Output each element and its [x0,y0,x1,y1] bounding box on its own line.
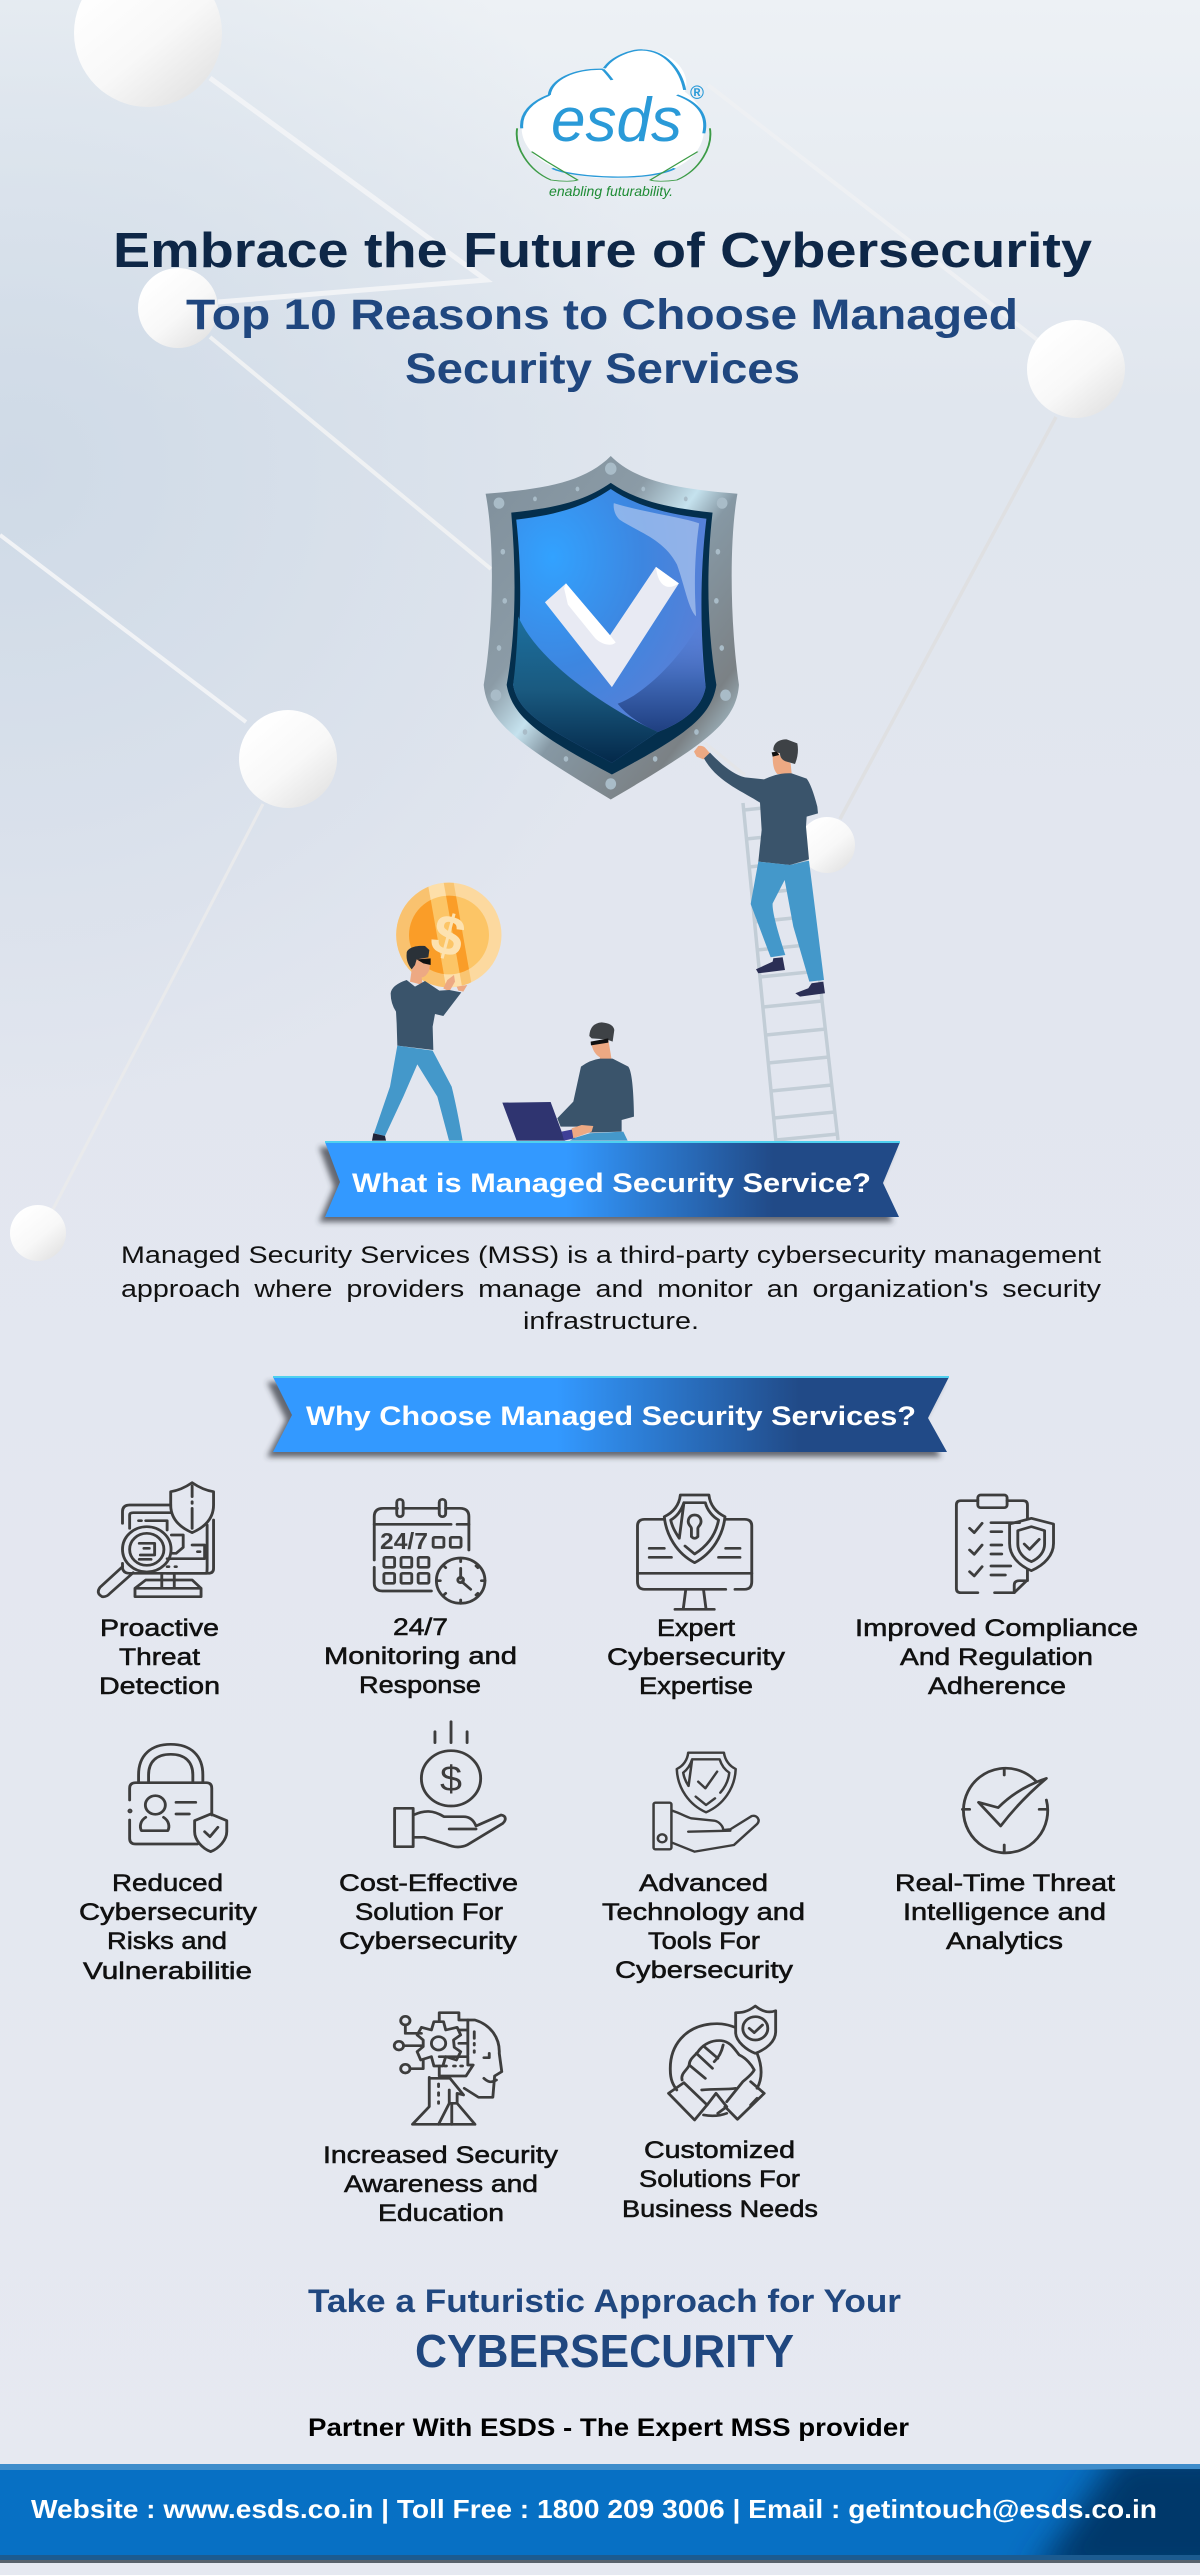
label: Cybersecurity [607,1644,785,1671]
label: Solution For [355,1899,503,1926]
label [855,1615,1138,1700]
label: Real-Time Threat [895,1870,1115,1897]
decorative network of lines and spheres [0,0,1125,1261]
banner: what is managed security service [319,1142,900,1222]
text: 24/7 in icon: 24/7 [380,1528,428,1554]
partner line: Partner With ESDS - The Expert MSS provider [308,2414,909,2442]
label: Response [359,1672,481,1699]
reason: 24/7 monitoring and response [324,1499,517,1699]
banner: why choose managed security services [267,1377,949,1457]
reason: proactive threat detection [98,1483,220,1700]
label: Monitoring and [324,1643,517,1670]
logo: esds cloud: enabling futurability. [549,183,673,199]
label: Vulnerabilitie [83,1958,252,1985]
icon: monitor, shield and magnifier [98,1483,214,1597]
label: Customized [644,2137,795,2164]
logo: esds cloud [517,50,710,199]
icon: clipboard with shield [956,1495,1054,1593]
person carrying coin [372,946,467,1141]
icon: calendar and clock [374,1499,485,1603]
illustration: shield and people [372,456,838,1142]
banner: why choose managed security services: Why Choose Managed Security Services? [306,1401,916,1431]
icon: metal shield [484,456,739,799]
label [602,1870,805,1984]
icon: ai head with gear [394,2013,502,2124]
label: Threat [119,1644,200,1671]
label: And Regulation [900,1644,1093,1671]
label: Cybersecurity [79,1899,257,1926]
paragraph: MSS definition: Managed Security Services (MSS) is a third-party cybersecurity management [121,1242,1101,1269]
label [607,1615,785,1700]
label: Cost-Effective [339,1870,518,1897]
icon: check mark [545,567,679,687]
label: Technology and [602,1899,805,1926]
text: dollar sign in icon: $ [440,1758,462,1799]
label: Solutions For [639,2166,800,2193]
logo: esds cloud: esds [551,86,682,155]
paragraph: MSS definition [121,1242,1101,1335]
label: Education [378,2200,504,2227]
label: Adherence [928,1673,1066,1700]
label: Intelligence and [903,1899,1106,1926]
logo: esds cloud: ® [690,83,704,104]
icon: gold coin [396,882,502,988]
label: 24/7 [393,1614,448,1641]
label [895,1870,1115,1955]
person at laptop [502,1022,634,1141]
footer contact bar: Website : www.esds.co.in | Toll Free : 1800 209 3006 | Email : getintouch@esds.co.in [31,2494,1157,2524]
closing heading: CYBERSECURITY [415,2325,794,2377]
reason: cost-effective solution [339,1722,518,1955]
closing heading: Take a Futuristic Approach for Your [308,2283,901,2319]
label: Business Needs [622,2196,818,2223]
label [324,1614,517,1699]
title: Embrace the Future of Cybersecurity [113,224,1092,278]
icon: hand holding dollar coin [395,1722,505,1847]
label: Analytics [946,1928,1063,1955]
reason: expert cybersecurity expertise [607,1495,785,1700]
reason: real-time threat intelligence [895,1768,1115,1955]
paragraph: MSS definition: infrastructure. [523,1308,699,1335]
label: Reduced [112,1870,223,1897]
closing heading [308,2283,901,2377]
icon: gold coin: $ [425,902,471,971]
paragraph: MSS definition: approach where providers manage and monitor an organization's security [121,1276,1101,1303]
label: Tools For [648,1928,760,1955]
label: Detection [99,1673,220,1700]
label: Cybersecurity [615,1957,793,1984]
label: Proactive [100,1615,219,1642]
label: Increased Security [323,2142,558,2169]
label [79,1870,257,1985]
subtitle [186,291,1018,393]
subtitle: Security Services [405,345,800,393]
reason: advanced technology and tools [602,1753,805,1984]
icon: monitor with keyhole shield [637,1495,752,1609]
label: Cybersecurity [339,1928,517,1955]
icon: hand holding shield [654,1753,759,1852]
person on ladder [694,739,825,997]
subtitle: Top 10 Reasons to Choose Managed [186,291,1018,339]
reason: increased security awareness [323,2013,558,2227]
label: Expertise [639,1673,753,1700]
icon: handshake with shield [669,2006,776,2120]
icon: ladder [743,803,838,1142]
reason: customized solutions [622,2006,818,2223]
label: Risks and [107,1928,227,1955]
reason: improved compliance [855,1495,1138,1700]
footer contact bar [0,2464,1200,2563]
reason: reduced cybersecurity risks [79,1744,257,1985]
label: Improved Compliance [855,1615,1138,1642]
label [323,2142,558,2227]
label: Awareness and [344,2171,538,2198]
icon: clock with check [962,1768,1048,1853]
label: Advanced [639,1870,768,1897]
banner: what is managed security service: What is Managed Security Service? [352,1168,871,1198]
icon: padlock with id and shield [129,1744,227,1852]
label: Expert [657,1615,735,1642]
label [339,1870,518,1955]
label [99,1615,220,1700]
label [622,2137,818,2223]
